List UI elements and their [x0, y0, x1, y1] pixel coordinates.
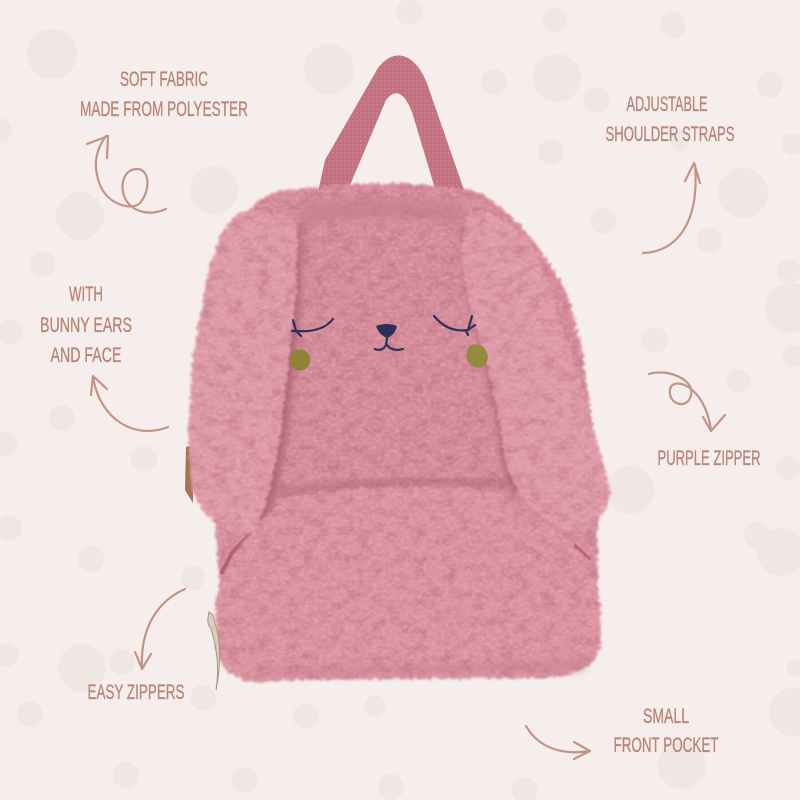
nose and mouth: [375, 324, 403, 350]
backpack body: [205, 183, 598, 600]
handle strap: [317, 56, 464, 197]
nose: [376, 324, 397, 338]
label: soft fabric: MADE FROM POLYESTER: [80, 98, 248, 121]
left closed eye: [292, 319, 333, 336]
label: easy zippers: EASY ZIPPERS: [88, 681, 184, 704]
label: bunny ears: [40, 283, 132, 367]
callout: adjustable straps: [606, 93, 734, 253]
label: small front pocket: SMALL: [643, 705, 689, 728]
right closed eye: [434, 316, 475, 335]
arrow: adjustable straps: [643, 163, 700, 253]
backpack: [185, 56, 610, 690]
right ear: [462, 210, 610, 533]
callout: easy zippers: [88, 589, 185, 704]
label: adjustable straps: ADJUSTABLE: [626, 93, 708, 116]
arrow: small front pocket: [526, 726, 590, 759]
right gold earring: [462, 341, 492, 371]
callout: bunny ears: [40, 283, 168, 431]
ear tag: [185, 445, 193, 503]
callout: small front pocket: [526, 705, 719, 759]
left ear: [189, 210, 298, 533]
label: bunny ears: AND FACE: [50, 344, 122, 367]
pocket lower shading: [240, 658, 590, 676]
front pocket: [216, 487, 601, 682]
label: small front pocket: [614, 705, 719, 757]
label: soft fabric: SOFT FABRIC: [120, 68, 208, 91]
arrow: bunny ears: [91, 376, 168, 431]
crease above pocket: [275, 482, 508, 494]
label: bunny ears: BUNNY EARS: [40, 314, 132, 337]
callout: purple zipper: [649, 372, 760, 470]
top seam shading: [300, 198, 462, 225]
label: bunny ears: WITH: [69, 283, 103, 306]
left gold earring: [290, 350, 310, 370]
callout: soft fabric: [80, 68, 248, 213]
zipper pull: [208, 612, 220, 690]
arrow: easy zippers: [135, 589, 185, 669]
label: adjustable straps: [606, 93, 734, 146]
label: small front pocket: FRONT POCKET: [614, 734, 719, 757]
arrow: soft fabric: [87, 136, 166, 213]
mouth: [375, 338, 403, 350]
zipper tape: [221, 508, 590, 574]
label: soft fabric: [80, 68, 248, 121]
arrow: purple zipper: [649, 372, 725, 431]
shadow under right ear: [463, 225, 520, 505]
shadow under left ear: [250, 225, 301, 525]
